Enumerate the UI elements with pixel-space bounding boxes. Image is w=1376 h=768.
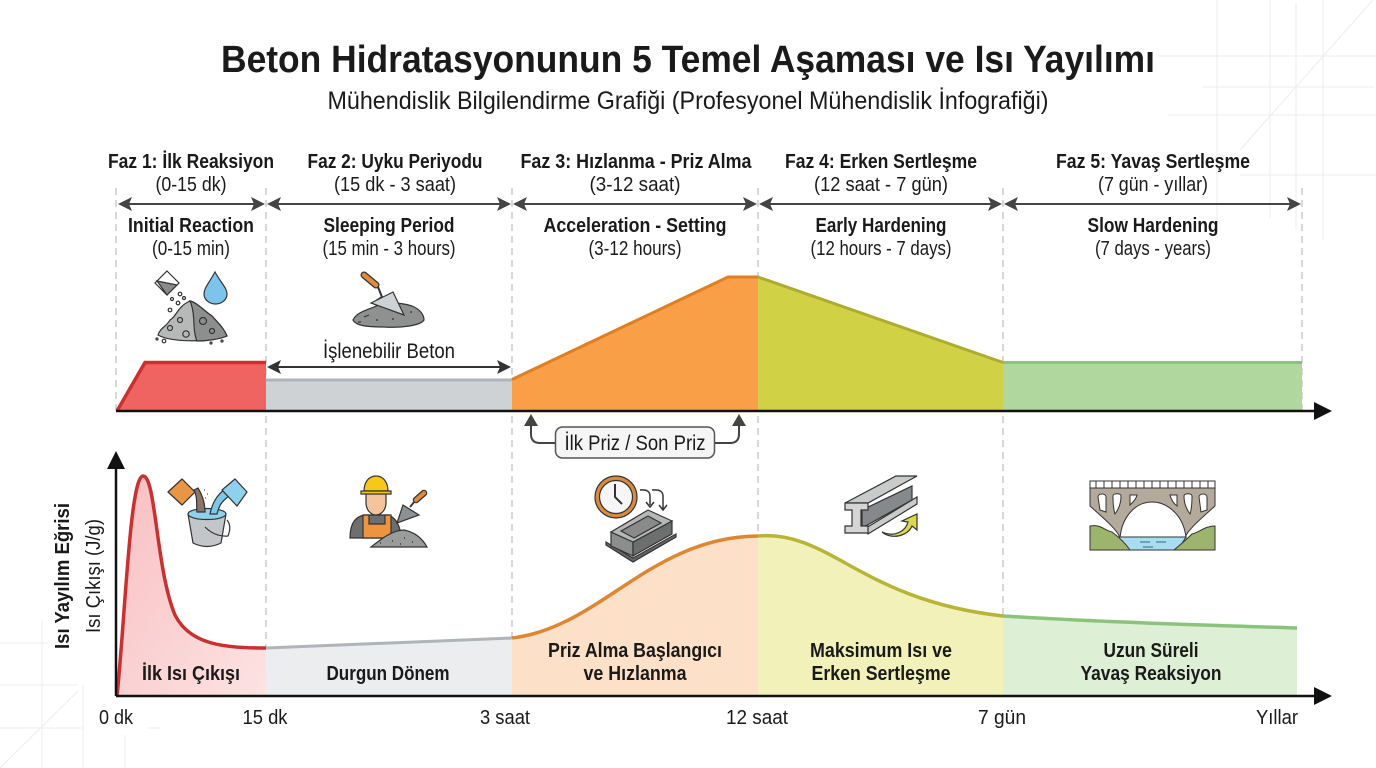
chart: heat release curve	[117, 476, 1297, 696]
area: phase 2	[266, 379, 512, 411]
panel: phase 3 header: Acceleration - Setting	[544, 215, 726, 237]
panel: phase 1 header: (0-15 min)	[152, 238, 230, 260]
area: phase 4	[758, 276, 1003, 411]
icon: steel beam with arrow	[845, 476, 917, 536]
area: slow hardening	[1003, 616, 1297, 696]
curve: acceleration	[512, 536, 758, 638]
panel: phase 1 header	[108, 150, 274, 260]
x axis tick labels: Yıllar	[1256, 707, 1298, 729]
label: maximum heat	[810, 639, 952, 685]
panel: phase 2 header: Faz 2: Uyku Periyodu	[308, 151, 482, 173]
icon: trowel and fresh concrete	[353, 275, 424, 327]
title: Beton Hidratasyonunun 5 Temel Aşaması ve Isı Yayılımı	[221, 39, 1155, 81]
panel: phase 1 header: Initial Reaction	[128, 215, 254, 237]
label: long-term reaction: Yavaş Reaksiyon	[1080, 662, 1222, 685]
panel: phase 2 header: Sleeping Period	[324, 215, 454, 237]
area: initial heat	[117, 476, 266, 696]
chart: workability phases	[116, 276, 1332, 420]
panel: phase 2 header	[267, 151, 511, 260]
x axis tick labels: 7 gün	[978, 707, 1026, 729]
icon: clock and formwork	[595, 476, 676, 562]
panel: phase 5 header: Slow Hardening	[1088, 215, 1218, 237]
icon: construction worker	[350, 476, 427, 547]
subtitle: Mühendislik Bilgilendirme Grafiği (Profesyonel Mühendislik İnfografiği)	[328, 86, 1048, 115]
callout: initial and final set	[524, 414, 746, 458]
panel: phase 1 header: Faz 1: İlk Reaksiyon	[108, 150, 274, 173]
curve: initial heat	[117, 476, 266, 696]
icon: mixing bucket	[168, 479, 247, 546]
x axis tick labels: 0 dk	[99, 707, 134, 729]
panel: phase 5 header	[1004, 151, 1301, 260]
label: workable concrete: İşlenebilir Beton	[323, 340, 455, 363]
label: workable concrete	[267, 340, 511, 374]
x axis tick labels: 15 dk	[242, 707, 288, 729]
label: setting and acceleration	[548, 639, 722, 685]
panel: phase 3 header: (3-12 hours)	[588, 238, 682, 260]
area: phase 5	[1003, 362, 1302, 411]
area: phase 1	[117, 362, 266, 411]
label: setting and acceleration: Priz Alma Başlangıcı	[548, 639, 722, 662]
panel: phase 5 header: (7 days - years)	[1095, 238, 1211, 260]
panel: phase 5 header: Faz 5: Yavaş Sertleşme	[1056, 151, 1250, 173]
icon: cement powder and water drop	[155, 271, 227, 344]
panel: phase 4 header: Faz 4: Erken Sertleşme	[785, 151, 977, 173]
label: dormant period: Durgun Dönem	[326, 662, 450, 685]
y axis title: Isı Yayılım Eğrisi	[52, 503, 74, 649]
panel: phase 3 header: Faz 3: Hızlanma - Priz Alma	[520, 151, 752, 173]
panel: phase 2 header: (15 min - 3 hours)	[322, 238, 456, 260]
label: initial heat: İlk Isı Çıkışı	[142, 662, 240, 685]
panel: phase 4 header: (12 hours - 7 days)	[810, 238, 952, 260]
area: phase 3	[512, 276, 758, 411]
label: maximum heat: Erken Sertleşme	[812, 662, 950, 685]
panel: phase 2 header: (15 dk - 3 saat)	[334, 174, 456, 196]
x axis tick labels: 3 saat	[480, 707, 530, 729]
x axis tick labels: 12 saat	[726, 707, 788, 729]
curve: dormant	[266, 638, 512, 648]
area: acceleration	[512, 536, 758, 696]
y axis	[107, 451, 125, 696]
panel: phase 3 header	[513, 151, 757, 260]
label: long-term reaction	[1080, 639, 1222, 685]
panel: phase 4 header: Early Hardening	[816, 215, 946, 237]
curve: slow hardening	[1003, 616, 1297, 628]
panel: phase 4 header	[759, 151, 1002, 260]
icon: arch bridge	[1090, 481, 1215, 550]
y axis unit: Isı Çıkışı (J/g)	[83, 519, 105, 633]
panel: phase 5 header: (7 gün - yıllar)	[1098, 174, 1208, 196]
label: long-term reaction: Uzun Süreli	[1104, 639, 1198, 662]
panel: phase 1 header: (0-15 dk)	[156, 174, 226, 196]
x axis	[116, 687, 1332, 705]
area: early hardening	[758, 536, 1003, 696]
panel: phase 4 header: (12 saat - 7 gün)	[814, 174, 948, 196]
x axis tick labels	[99, 707, 1298, 729]
label: maximum heat: Maksimum Isı ve	[810, 639, 952, 662]
curve: early hardening	[758, 536, 1003, 616]
callout: initial and final set: İlk Priz / Son Priz	[564, 432, 706, 455]
panel: phase 3 header: (3-12 saat)	[590, 174, 680, 196]
label: setting and acceleration: ve Hızlanma	[584, 662, 687, 685]
area: dormant	[266, 638, 512, 696]
